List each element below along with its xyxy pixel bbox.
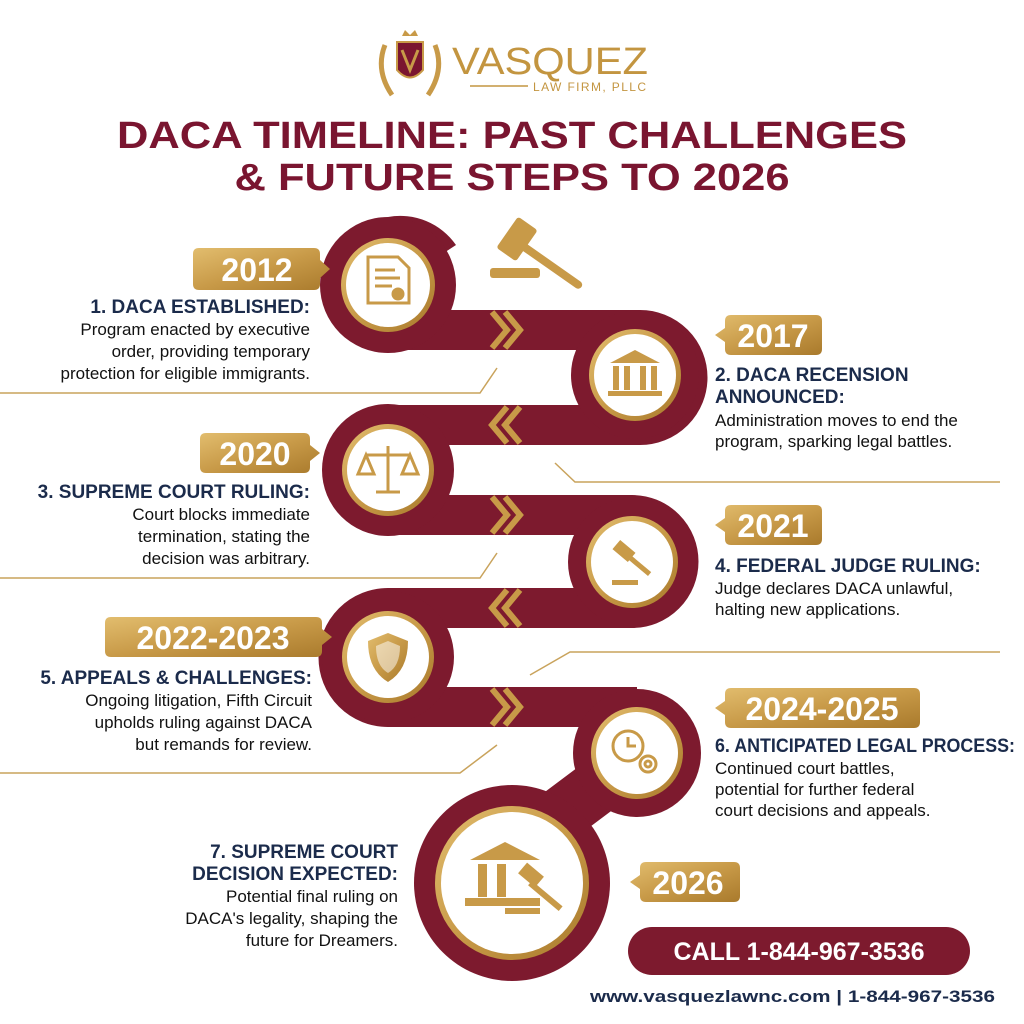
text: event 1: Program enacted by executive [80, 320, 310, 339]
text: event 7: DECISION EXPECTED: [192, 864, 398, 885]
connector arrows [0, 368, 1000, 773]
text: event 5 [40, 668, 313, 754]
text: event 7: DACA's legality, shaping the [185, 909, 398, 928]
call button [628, 927, 970, 975]
text: event 6 [715, 736, 1015, 820]
icon: gavel [612, 540, 651, 585]
icon: shield [368, 633, 408, 682]
footer: www.vasquezlawnc.com | 1-844-967-3536 [589, 987, 995, 1006]
icon circles [320, 217, 701, 981]
text: event 3: 3. SUPREME COURT RULING: [38, 482, 310, 503]
text: event 7: 7. SUPREME COURT [210, 842, 398, 863]
logo: LAW FIRM, PLLC [533, 80, 646, 94]
text: event 5: Ongoing litigation, Fifth Circuit [85, 691, 312, 710]
icon: scales [358, 446, 418, 492]
text: event 4 [715, 556, 981, 619]
text: event 6: potential for further federal [715, 780, 914, 799]
title: & FUTURE STEPS TO 2026 [234, 157, 790, 199]
year labels: 2021 [737, 508, 809, 544]
logo: VASQUEZ [452, 41, 648, 83]
logo [381, 30, 648, 95]
timeline path [338, 216, 688, 830]
text: event 1: 1. DACA ESTABLISHED: [90, 297, 310, 318]
icon: courthouse [608, 350, 662, 396]
text: event 4: 4. FEDERAL JUDGE RULING: [715, 556, 981, 577]
text: event 7 [185, 842, 398, 950]
call button: CALL 1-844-967-3536 [673, 938, 925, 966]
year labels: 2022-2023 [136, 620, 290, 656]
text: event 6: court decisions and appeals. [715, 801, 930, 820]
icon: clock gear [613, 731, 656, 772]
text: event 5: but remands for review. [135, 735, 312, 754]
year labels: 2020 [219, 436, 291, 472]
text: event 7: future for Dreamers. [246, 931, 398, 950]
text: event 2: program, sparking legal battles. [715, 432, 952, 451]
text: event 2 [715, 365, 958, 451]
text: event 6: Continued court battles, [715, 759, 895, 778]
title: DACA TIMELINE: PAST CHALLENGES [117, 115, 907, 157]
text: event 3: decision was arbitrary. [142, 549, 310, 568]
year labels: 2012 [221, 252, 293, 288]
year labels: 2017 [737, 318, 809, 354]
text: event 7: Potential final ruling on [226, 887, 398, 906]
text: event 1: protection for eligible immigrants. [61, 364, 310, 383]
text: event 2: ANNOUNCED: [715, 387, 845, 408]
text: event 3 [38, 482, 310, 568]
icon: top gavel [490, 217, 584, 290]
text: event 3: Court blocks immediate [132, 505, 310, 524]
text: event 5: 5. APPEALS & CHALLENGES: [40, 668, 312, 689]
text: event 3: termination, stating the [138, 527, 310, 546]
text: event 4: halting new applications. [715, 600, 900, 619]
year labels [105, 248, 920, 902]
year labels: 2026 [652, 865, 724, 901]
icon: document [368, 257, 409, 303]
title [117, 115, 907, 199]
year labels: 2024-2025 [745, 691, 899, 727]
text: event 2: 2. DACA RECENSION [715, 365, 909, 386]
text: event 2: Administration moves to end the [715, 411, 958, 430]
text: event 4: Judge declares DACA unlawful, [715, 579, 953, 598]
icon: court gavel [465, 842, 563, 914]
text: event 5: upholds ruling against DACA [95, 713, 313, 732]
text: event 1: order, providing temporary [112, 342, 310, 361]
chevrons [492, 312, 520, 725]
text: event 1 [61, 297, 310, 383]
